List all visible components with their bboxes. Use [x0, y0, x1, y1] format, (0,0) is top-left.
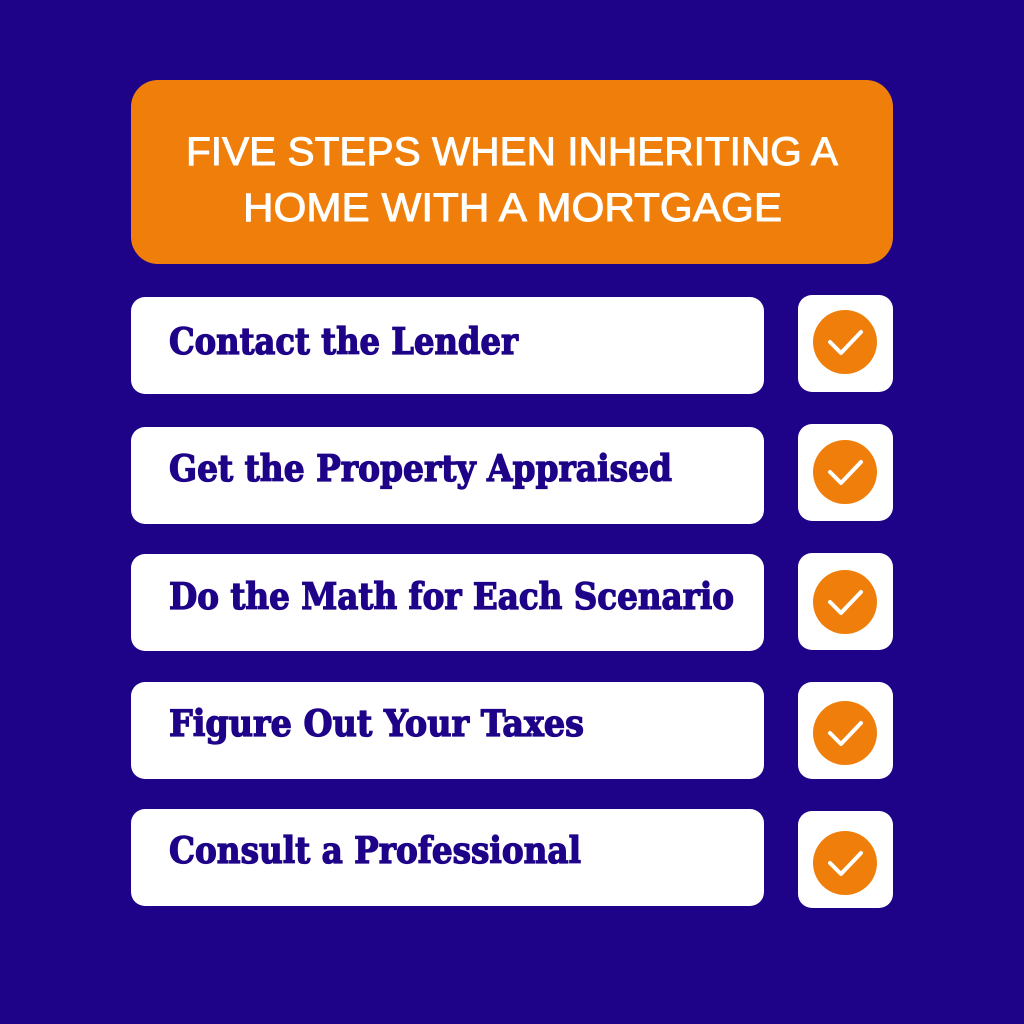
step 1: Contact the Lender: Contact the Lender	[169, 321, 519, 363]
icon: checkmark 1	[798, 295, 893, 392]
step 1: Contact the Lender	[131, 297, 764, 394]
icon: checkmark 4	[798, 682, 893, 779]
step 5: Consult a Professional	[131, 809, 764, 906]
icon: checkmark 2	[798, 424, 893, 521]
step 3: Do the Math for Each Scenario: Do the Math for Each Scenario	[169, 576, 734, 618]
step 5: Consult a Professional: Consult a Professional	[169, 830, 581, 872]
icon: checkmark 3	[798, 553, 893, 650]
step 4: Figure Out Your Taxes: Figure Out Your Taxes	[169, 703, 584, 745]
step 2: Get the Property Appraised: Get the Property Appraised	[169, 448, 672, 490]
step 2: Get the Property Appraised	[131, 427, 764, 524]
icon: checkmark 5	[798, 811, 893, 908]
step 3: Do the Math for Each Scenario	[131, 554, 764, 651]
step 4: Figure Out Your Taxes	[131, 682, 764, 779]
title banner	[131, 80, 893, 264]
title line 1: FIVE STEPS WHEN INHERITING A	[186, 130, 838, 174]
title line 2: HOME WITH A MORTGAGE	[243, 186, 782, 230]
